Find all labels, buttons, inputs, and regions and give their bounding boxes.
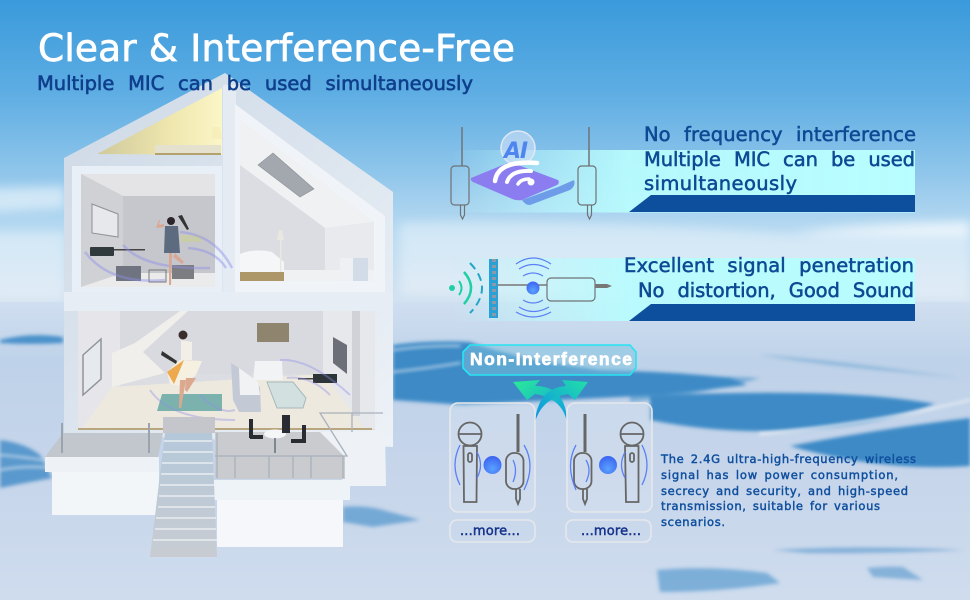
icon: signal source waves xyxy=(450,263,482,313)
dancing woman xyxy=(161,330,202,408)
description text: transmission, suitable for various xyxy=(661,499,880,513)
attic room xyxy=(97,88,222,155)
icon: wall xyxy=(489,259,498,318)
description text: scenarios. xyxy=(661,515,725,529)
staircase xyxy=(112,311,188,387)
sofa xyxy=(231,363,261,412)
dark accent bar xyxy=(629,195,915,212)
glass table xyxy=(267,382,306,408)
microphone receiver lower room xyxy=(298,374,337,383)
house outer shell xyxy=(64,73,393,447)
right terrace xyxy=(212,413,383,547)
skylight vent xyxy=(258,153,314,197)
mic pair right xyxy=(567,403,652,512)
wifi arcs xyxy=(495,163,537,184)
bookshelf xyxy=(257,323,289,342)
window xyxy=(83,339,101,395)
more button left xyxy=(450,520,535,542)
entrance stairs xyxy=(150,417,217,557)
lamp posts xyxy=(61,423,150,453)
panel: signal penetration xyxy=(450,254,915,321)
icon: AI wifi platform xyxy=(471,131,574,205)
vertical dividing wall xyxy=(223,85,236,295)
railing xyxy=(215,413,383,478)
description text: secrecy and security, and high-speed xyxy=(661,484,908,498)
floor lamp xyxy=(277,230,284,272)
more button left: ...more... xyxy=(460,524,520,539)
badge: Non-Interference xyxy=(470,349,632,369)
panel text: simultaneously xyxy=(644,172,797,195)
wall tv xyxy=(333,337,347,374)
icon: receiver with waves xyxy=(498,258,612,317)
icon: right wireless receiver xyxy=(578,127,596,219)
dark accent bar xyxy=(629,304,915,321)
dresser xyxy=(340,258,368,281)
attic bed and lamp xyxy=(155,127,222,155)
house illustration xyxy=(45,73,393,557)
panel text xyxy=(644,123,916,195)
description text xyxy=(660,452,916,529)
upper right room xyxy=(235,104,385,292)
AI badge: AI xyxy=(502,139,528,164)
more button right xyxy=(566,520,651,542)
panel: non-interference xyxy=(450,345,652,542)
icon: left wireless receiver xyxy=(451,127,469,219)
subtitle: Multiple MIC can be used simultaneously xyxy=(37,72,473,95)
description text: The 2.4G ultra-high-frequency wireless xyxy=(660,452,916,466)
table and chairs xyxy=(249,415,306,453)
highlight band xyxy=(450,258,915,321)
background: sky xyxy=(0,0,970,304)
bed xyxy=(240,250,284,281)
arrows xyxy=(513,380,588,422)
title: Clear & Interference-Free xyxy=(38,26,515,70)
mic pair left xyxy=(450,403,535,512)
description text: signal has low power consumption, xyxy=(661,468,898,482)
carpet xyxy=(157,394,222,411)
panel text: No frequency interference xyxy=(644,123,916,146)
microphone receiver upper room xyxy=(90,247,145,256)
left terrace xyxy=(45,423,163,515)
upper left room xyxy=(72,166,222,302)
signal waves lower room xyxy=(150,360,350,420)
right terrace block xyxy=(320,432,386,486)
lower room xyxy=(78,311,375,430)
back sofa xyxy=(253,361,283,380)
badge xyxy=(463,345,636,375)
panel text xyxy=(624,254,914,302)
signal waves upper room xyxy=(85,232,232,281)
background: snow field xyxy=(0,302,970,600)
highlight band xyxy=(450,150,915,212)
more button right: ...more... xyxy=(581,524,641,539)
panel text: Excellent signal penetration xyxy=(624,254,914,277)
panel text: Multiple MIC can be used xyxy=(644,148,915,171)
panel: no frequency interference xyxy=(450,123,916,219)
woman with microphone xyxy=(156,215,189,285)
panel text: No distortion, Good Sound xyxy=(638,279,914,302)
floor slab xyxy=(64,292,393,311)
